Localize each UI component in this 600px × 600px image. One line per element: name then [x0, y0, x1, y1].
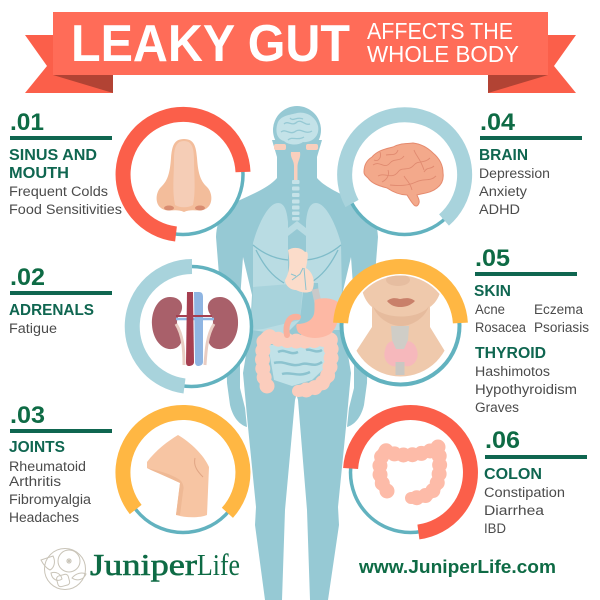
text block: .03 joints: Fibromyalgia	[9, 492, 92, 507]
title banner: LEAKY GUT	[71, 15, 350, 73]
icon: logo emblem	[41, 548, 86, 590]
icon: knee	[147, 435, 209, 517]
text block: .05 skin and thyroid	[474, 245, 589, 415]
text block: .03 joints: JOINTS	[9, 439, 65, 456]
logo: JuniperLife: Life	[197, 547, 240, 582]
website url: www.JuniperLife.com	[358, 557, 556, 577]
text block: .06 colon: .06	[485, 427, 520, 454]
text block: .03 joints: .03	[10, 402, 45, 429]
text block: .05 skin and thyroid: Graves	[475, 400, 519, 415]
panel: .04 brain ring	[344, 114, 465, 234]
panel: .03 joints ring	[123, 412, 243, 532]
title banner: WHOLE BODY	[367, 41, 519, 67]
logo: JuniperLife: Juniper	[90, 547, 198, 582]
text block: .01 sinus and mouth: Food Sensitivities	[9, 202, 122, 217]
text block: .03 joints: Headaches	[9, 510, 79, 525]
icon: neck and thyroid	[356, 276, 444, 376]
text block: .01 sinus and mouth	[9, 109, 122, 217]
central human body figure	[216, 106, 378, 600]
icon: kidneys	[152, 292, 238, 366]
panel: .01 sinus and mouth ring	[123, 114, 243, 234]
lungs and chest	[252, 203, 342, 335]
text block: .02 adrenals	[9, 264, 112, 336]
text block: .03 joints: Rheumatoid	[9, 459, 86, 474]
text block: .02 adrenals: Fatigue	[9, 321, 57, 336]
icon: colon	[380, 447, 440, 498]
text block: .01 sinus and mouth: Frequent Colds	[9, 184, 108, 199]
text block: .05 skin and thyroid: Acne	[475, 302, 505, 317]
heart	[285, 248, 314, 293]
sinuses and throat	[274, 144, 318, 180]
spine	[292, 180, 300, 220]
text block: .04 brain: BRAIN	[479, 147, 528, 164]
title banner	[25, 12, 576, 93]
text block: .01 sinus and mouth: .01	[10, 109, 44, 136]
text block: .01 sinus and mouth: MOUTH	[9, 165, 69, 182]
esophagus	[312, 288, 322, 304]
text block: .04 brain: ADHD	[479, 202, 520, 217]
text block: .05 skin and thyroid: Eczema	[534, 302, 583, 317]
text block: .01 sinus and mouth: SINUS AND	[9, 147, 97, 164]
brain in head	[276, 113, 318, 145]
stomach	[286, 298, 339, 338]
text block: .05 skin and thyroid: Hashimotos	[475, 364, 550, 379]
title banner: AFFECTS THE	[367, 18, 513, 44]
text block: .05 skin and thyroid: THYROID	[475, 345, 546, 362]
text block: .02 adrenals: ADRENALS	[9, 302, 94, 319]
panel: .05 skin and thyroid ring	[341, 266, 460, 384]
icon: nose	[157, 139, 211, 212]
text block: .02 adrenals: .02	[10, 264, 45, 291]
panel: .02 adrenals ring	[132, 266, 252, 386]
icon: brain	[364, 143, 443, 206]
text block: .04 brain: Depression	[479, 166, 550, 181]
text block: .03 joints: Arthritis	[9, 474, 61, 489]
text block: .04 brain: .04	[480, 109, 516, 136]
text block: .04 brain: Anxiety	[479, 184, 527, 199]
text block: .05 skin and thyroid: Rosacea	[475, 320, 526, 335]
text block: .05 skin and thyroid: Hypothyroidism	[475, 382, 577, 397]
text block: .06 colon: Constipation	[484, 485, 565, 500]
small intestine	[268, 343, 328, 386]
text block: .05 skin and thyroid: Psoriasis	[534, 320, 589, 335]
text block: .03 joints	[9, 402, 112, 525]
text block: .05 skin and thyroid: SKIN	[474, 283, 511, 300]
text block: .05 skin and thyroid: .05	[475, 245, 510, 272]
text block: .06 colon: COLON	[484, 466, 542, 483]
text block: .06 colon: IBD	[484, 521, 506, 536]
logo: JuniperLife	[41, 547, 240, 590]
text block: .06 colon: Diarrhea	[484, 503, 545, 518]
panel: .06 colon ring	[350, 412, 470, 532]
text block: .04 brain	[479, 109, 582, 217]
text block: .06 colon	[484, 427, 587, 536]
large intestine	[262, 336, 331, 391]
